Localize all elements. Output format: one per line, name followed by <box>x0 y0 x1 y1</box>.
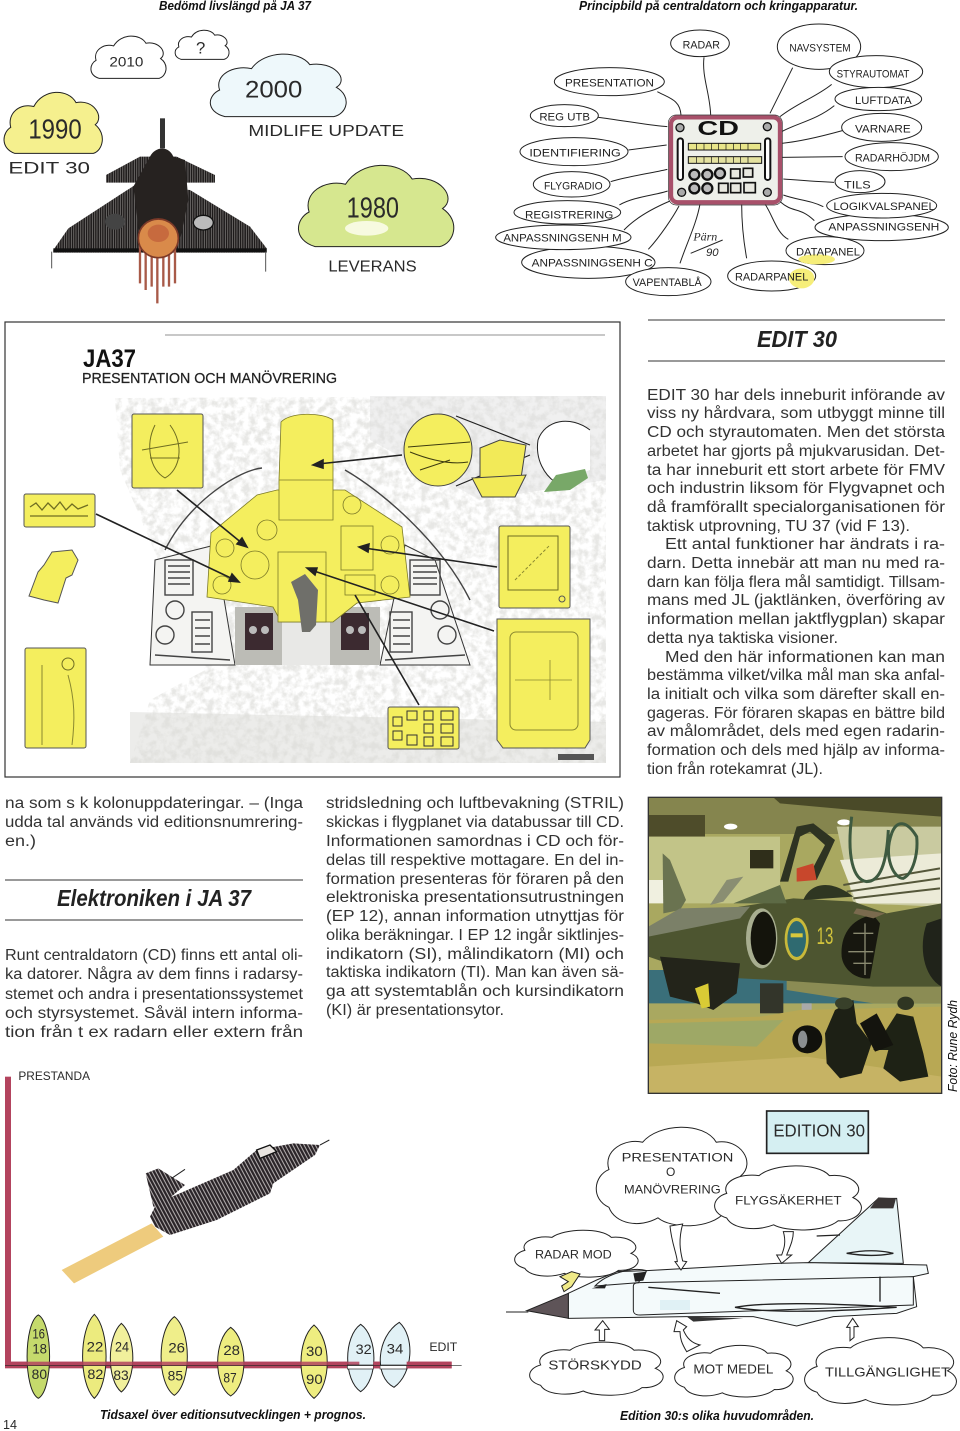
text block: middle column <box>326 795 624 1019</box>
peripheral nodes <box>496 24 948 296</box>
floor <box>648 1007 942 1093</box>
signature <box>691 230 723 259</box>
cloud: 1990 <box>4 92 102 153</box>
node labels: REGISTRERING <box>525 209 613 221</box>
node labels: LUFTDATA <box>855 95 912 107</box>
heading: Elektroniken i JA 37: Elektroniken i JA 37 <box>57 885 252 911</box>
node labels: STYRAUTOMAT <box>837 68 909 80</box>
equipment <box>860 1013 893 1052</box>
edition numbers: 30 <box>306 1343 323 1359</box>
edition numbers: 26 <box>168 1339 185 1355</box>
node labels: ANPASSNINGSENH M <box>503 233 622 245</box>
node labels: NAVSYSTEM <box>789 43 851 55</box>
text block: EDIT 30 article: Med den här informationen kan man <box>665 649 945 666</box>
panel inset: keypad <box>388 707 459 749</box>
text block: EDIT 30 article: la initialt och vilka som därefter skall en- <box>647 686 945 703</box>
cloud: 2000: 2000 <box>245 76 302 103</box>
control stick <box>291 574 318 632</box>
cloud: presentation och manövrering: PRESENTATION <box>622 1151 733 1165</box>
photo credit: Foto: Rune Rydh <box>946 1000 960 1092</box>
chart: edition timeline <box>5 1069 462 1398</box>
edition markers <box>27 1314 410 1398</box>
wheel <box>792 1025 822 1053</box>
pointer arrows <box>560 1224 858 1352</box>
speckled background <box>115 396 606 763</box>
CD unit: CD <box>697 117 739 140</box>
panel inset: radar <box>132 414 203 488</box>
node labels: RADARHÖJDM <box>855 153 930 165</box>
edition numbers: 85 <box>168 1368 183 1384</box>
node labels: VARNARE <box>855 124 911 136</box>
callout arrows <box>96 455 497 705</box>
roundel <box>785 918 809 960</box>
heading: EDIT 30 <box>648 320 945 361</box>
text block: left column body: tion från t ex radarn eller extern från <box>5 1024 303 1041</box>
text block: left column body: ka datorer. Några av dem finns i radarsy- <box>5 966 303 983</box>
illustration: life span clouds and jet <box>4 30 454 303</box>
text block: EDIT 30 article: formation och dels med hjälp av informa- <box>647 742 945 759</box>
text block: EDIT 30 article: CD och styrautomaten. Men det största <box>647 424 945 441</box>
text block: left column body: och styrsystemet. Såväl intern informa- <box>5 1005 303 1022</box>
text block: EDIT 30 article: och industrin liksom för Flygvapnet och <box>647 480 945 497</box>
under-panel dark boxes <box>235 607 380 665</box>
axes <box>5 1077 452 1368</box>
edition numbers: 22 <box>87 1339 104 1355</box>
cloud: radar mod <box>515 1230 638 1277</box>
text block: middle column: stridsledning och luftbevakning (STRIL) <box>326 795 624 812</box>
cloud: tillgänglighet: TILLGÄNGLIGHET <box>825 1366 950 1380</box>
node labels: IDENTIFIERING <box>529 148 621 160</box>
landing gear <box>660 957 740 1010</box>
HUD circle and sight <box>404 414 530 497</box>
edition numbers: 87 <box>223 1369 237 1385</box>
cloud: störskydd: STÖRSKYDD <box>548 1358 642 1372</box>
text block: left column intro: na som s k kolonuppdateringar. – (Inga <box>5 795 303 812</box>
heading: JA37: JA37 <box>83 345 136 373</box>
node labels: REG UTB <box>539 112 590 124</box>
node labels: DATAPANEL <box>796 247 860 259</box>
text block: left column body <box>5 947 304 1041</box>
cloud: 1990: 1990 <box>28 113 82 144</box>
cloud: presentation och manövrering: MANÖVRERING <box>624 1182 721 1196</box>
technician left <box>825 1000 872 1078</box>
tail fin <box>663 853 686 913</box>
cloud: question mark <box>175 30 229 59</box>
text block: middle column: skickas i flygplanet via databussar till CD. <box>326 814 624 831</box>
text block: middle column: (EP 12), annan information utnyttjas för <box>326 908 624 925</box>
cockpit side line art <box>150 545 470 665</box>
photo: JA 37 in hangar <box>648 797 942 1093</box>
cloud: radar mod: RADAR MOD <box>535 1247 612 1261</box>
cloud: motmedel <box>675 1345 793 1397</box>
text block: left column intro <box>5 795 303 850</box>
panel inset: side panel <box>25 648 86 748</box>
text block: EDIT 30 article: Ett antal funktioner har ändrats i ra- <box>665 536 945 553</box>
text block: middle column: olika beräkningar. I EP 12 ingår siktlinjes- <box>326 927 624 944</box>
signature: Pärn <box>692 230 717 244</box>
label: edit 30: EDIT 30 <box>8 158 90 177</box>
label: leverans: LEVERANS <box>328 259 417 276</box>
text block: EDIT 30 article: detta nya taktiska visioner. <box>647 630 838 647</box>
panel inset: warning panel <box>24 494 95 527</box>
intake <box>746 908 777 968</box>
jet climbing <box>146 1140 329 1235</box>
connector lines <box>598 57 843 263</box>
box: Edition 30 <box>767 1111 868 1153</box>
node labels: RADAR <box>683 39 720 51</box>
edition numbers: 34 <box>387 1340 404 1356</box>
text block: EDIT 30 article: arbetet har gjorts på mjukvarusidan. Det- <box>647 443 945 460</box>
heading: EDIT 30: EDIT 30 <box>757 326 837 352</box>
cloud: presentation och manövrering <box>596 1127 750 1226</box>
text block: EDIT 30 article: bestämma vilket/vilka mål man ska anfal- <box>647 667 945 684</box>
text block: left column body: stemet och andra i presentationssystemet <box>5 986 304 1003</box>
edition numbers: 82 <box>87 1366 104 1382</box>
text block: EDIT 30 article: av målområdet, dels med egen radarin- <box>647 723 945 740</box>
cloud: 1980 <box>298 165 454 247</box>
text block: EDIT 30 article: tion från rotekamrat (JL). <box>647 761 823 778</box>
yellow highlights <box>789 254 835 288</box>
caption: timeline: Tidsaxel över editionsutvecklingen + prognos. <box>100 1408 366 1422</box>
node labels: VAPENTABLÅ <box>633 276 702 289</box>
text block: left column intro: en.) <box>5 833 36 850</box>
text block: EDIT 30 article: darn kan följa flera mål samtidigt. Tillsam- <box>647 574 945 591</box>
node labels: PRESENTATION <box>565 78 654 90</box>
cloud: 2000 <box>210 54 346 117</box>
edition numbers: 80 <box>32 1366 47 1382</box>
panel inset: head-down display <box>497 619 590 748</box>
axis over markers <box>5 1362 462 1369</box>
text block: middle column: indikatorn (SI), målindikatorn (MI) och <box>326 946 624 963</box>
text block: left column intro: udda tal används vid editionsnumrering- <box>5 814 303 831</box>
cloud: motmedel: MOT MEDEL <box>693 1362 773 1376</box>
text block: EDIT 30 article <box>647 387 946 778</box>
pilot helmet <box>537 421 590 492</box>
jet exhaust <box>62 1223 163 1283</box>
node labels: LOGIKVALSPANEL <box>833 201 935 213</box>
cloud: störskydd <box>530 1342 663 1395</box>
heading: Elektroniken i JA 37 <box>5 880 303 920</box>
fuselage <box>648 898 942 987</box>
node labels: RADARPANEL <box>735 272 808 284</box>
label: midlife update: MIDLIFE UPDATE <box>248 123 404 140</box>
text block: EDIT 30 article: då framförallt specialorganisationen för <box>647 499 945 516</box>
text block: EDIT 30 article: information mellan jaktflygplan) skapar <box>647 611 945 628</box>
text block: EDIT 30 article: ta har inneburit ett stort arbete för FMV <box>647 462 946 479</box>
edition numbers: 28 <box>223 1342 240 1358</box>
cloud: 2010 <box>91 36 166 78</box>
signature: 90 <box>706 247 719 259</box>
axis label: PRESTANDA <box>18 1069 90 1083</box>
text block: EDIT 30 article: taktisk utprovning, TU 37 (vid F 13). <box>647 518 910 535</box>
node labels: ANPASSNINGSENH <box>828 222 939 234</box>
text block: EDIT 30 article: viss ny hårdvara, som utbyggt minne till <box>647 405 945 422</box>
text block: middle column: delas till respektive mottagare. En del in- <box>326 852 624 869</box>
cloud: tillgänglighet <box>805 1338 956 1405</box>
text block: middle column: (KI) är presentationsytor. <box>326 1002 504 1019</box>
nose bay <box>841 915 880 979</box>
caption: main areas: Edition 30:s olika huvudområden. <box>620 1409 814 1423</box>
node labels <box>503 39 939 289</box>
panel: JA37 cockpit <box>5 322 620 777</box>
cloud: question mark: ? <box>196 38 205 57</box>
CD unit <box>668 115 782 205</box>
cloud: presentation och manövrering: O <box>666 1165 675 1179</box>
cloud: 1980: 1980 <box>347 192 399 224</box>
rear body <box>648 970 942 1003</box>
maker logo <box>558 754 594 760</box>
edition numbers: 83 <box>113 1367 129 1383</box>
edition numbers: 90 <box>306 1371 323 1387</box>
cloud: flygsäkerhet <box>715 1166 861 1230</box>
node labels: ANPASSNINGSENH C <box>532 258 653 270</box>
edition numbers: 16 <box>32 1325 45 1341</box>
text block: EDIT 30 article: darn. Detta innebär att man nu med ra- <box>647 555 945 572</box>
jet: rear view <box>52 118 267 303</box>
edition numbers: EDIT <box>429 1340 458 1354</box>
edition numbers: 18 <box>32 1340 47 1356</box>
text block: left column body: Runt centraldatorn (CD) finns ett antal oli- <box>5 947 303 964</box>
panel inset: radar display <box>499 526 570 608</box>
text block: EDIT 30 article: mans med JL (jaktlänken, överföring av <box>647 592 945 609</box>
text block: middle column: Informationen samordnas i CD och för- <box>326 833 624 850</box>
subheading: PRESENTATION OCH MANÖVRERING <box>82 369 337 387</box>
text block: EDIT 30 article: gageras. För föraren skapas en bättre bild <box>647 705 945 722</box>
cloud: 2010: 2010 <box>109 54 144 70</box>
edition numbers: 32 <box>356 1341 372 1357</box>
box: Edition 30: EDITION 30 <box>773 1121 865 1141</box>
node labels: TILS <box>844 179 871 191</box>
text block: middle column: taktiska indikatorn (TI). Man kan även sä- <box>326 964 624 981</box>
cloud: flygsäkerhet: FLYGSÄKERHET <box>735 1193 842 1207</box>
canopy <box>780 823 835 882</box>
diagram: central computer and peripherals <box>496 24 948 296</box>
text block: middle column: formation presenteras för föraren på den <box>326 871 624 888</box>
text block: EDIT 30 article: EDIT 30 har dels inneburit införande av <box>647 387 945 404</box>
yellow instrument panel <box>207 414 410 622</box>
edition numbers: 24 <box>115 1339 129 1355</box>
text block: middle column: elektroniska presentationsutrustningen <box>326 889 624 906</box>
text block: middle column: ga att systemtablån och kursindikatorn <box>326 983 624 1000</box>
faint top rule <box>165 334 605 336</box>
plane side view <box>506 1197 928 1326</box>
diagram: Edition 30 main areas <box>506 1111 956 1405</box>
panel inset: throttle <box>29 550 78 603</box>
technician right <box>873 1013 928 1082</box>
tail number: 13 <box>817 923 833 950</box>
edition numbers <box>32 1325 458 1387</box>
node labels: FLYGRADIO <box>544 180 603 192</box>
